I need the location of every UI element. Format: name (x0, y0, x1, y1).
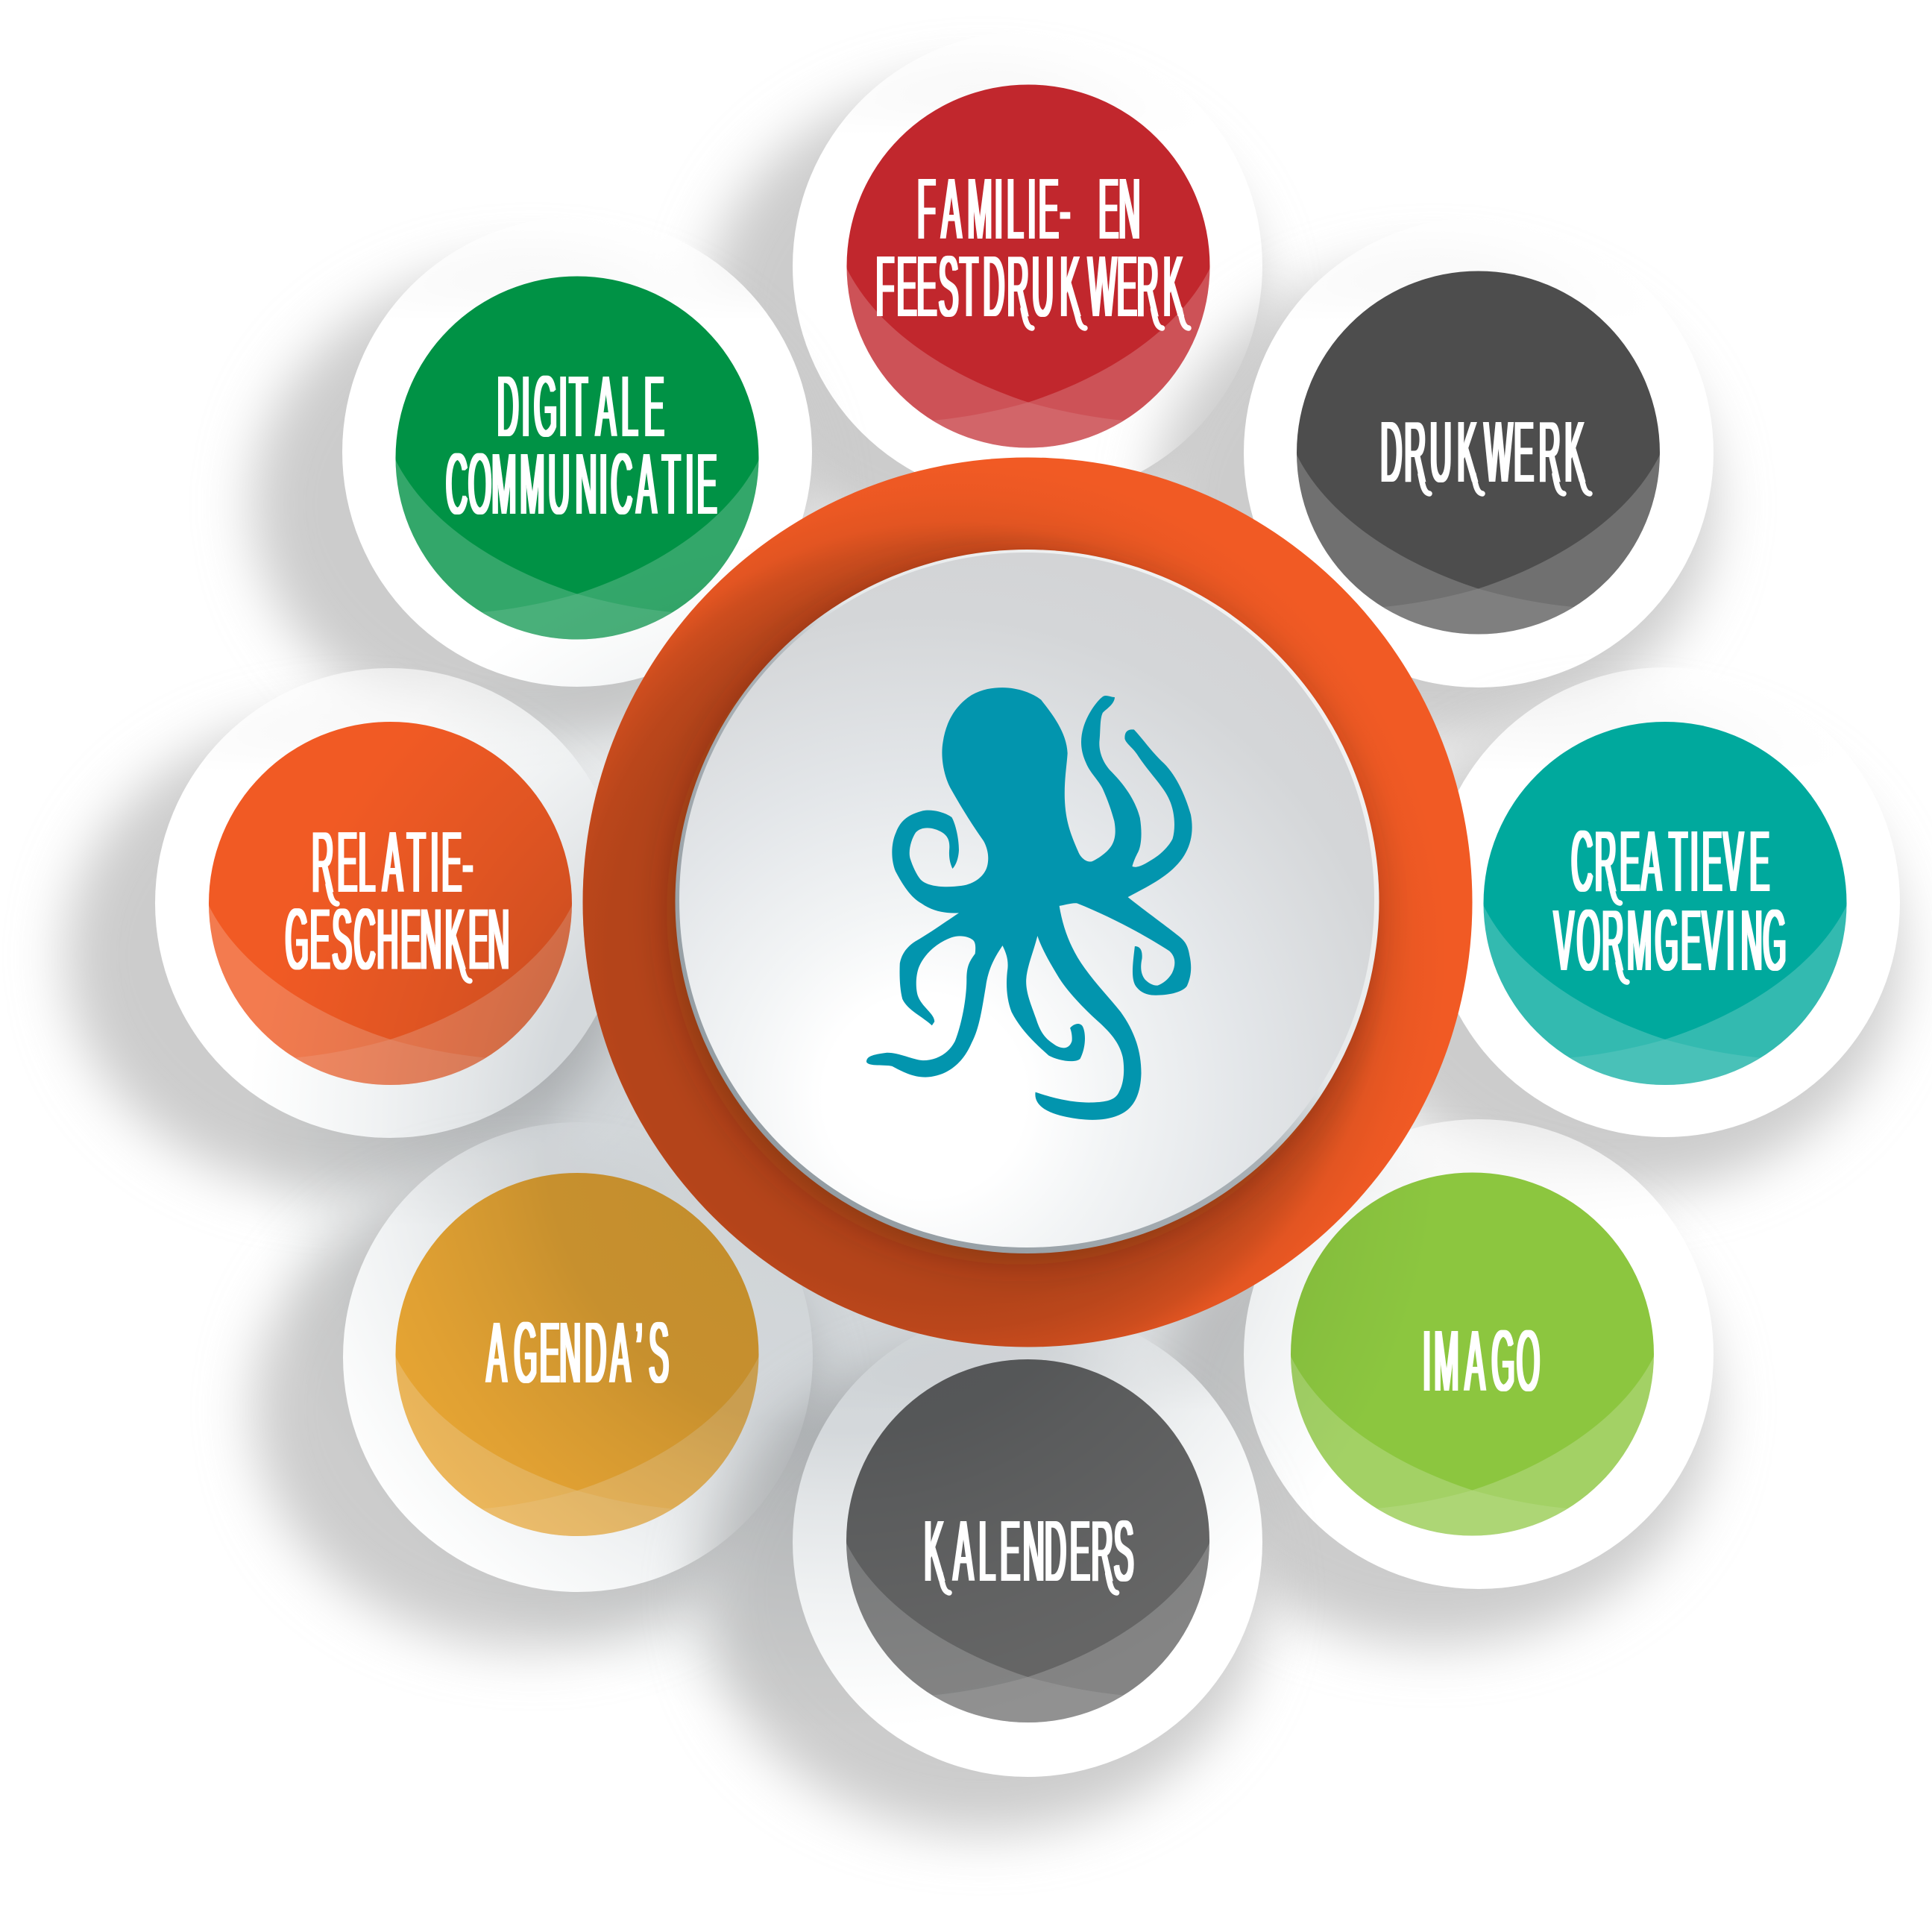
main ring cast shadow (246, 537, 1439, 1730)
ring: drukwerk (1154, 218, 1714, 743)
label: agenda's: AGENDA’S (487, 1305, 669, 1401)
label: creatieve vormgeving: CREATIEVE (1571, 814, 1769, 910)
panel: drukwerk disc (1254, 271, 1702, 676)
label: imago: IMAGO (1423, 1313, 1540, 1409)
label: kalenders: KALENDERS (924, 1503, 1133, 1599)
label: digitale communicatie: DIGITALE (497, 359, 664, 455)
label: relatiegeschenken: RELATIE- (312, 814, 473, 910)
panel: creatieve vormgeving disc (1441, 722, 1889, 1127)
label: digitale communicatie (446, 359, 717, 532)
central orange ring (583, 458, 1472, 1347)
ring: kalenders (703, 1307, 1262, 1833)
panel: digitale communicatie disc (353, 276, 801, 682)
label: creatieve vormgeving: VORMGEVING (1554, 893, 1787, 989)
panel: kalenders disc (804, 1359, 1251, 1764)
panel: imago disc (1248, 1172, 1696, 1578)
ring: imago (1154, 1119, 1714, 1645)
panel: familie- en feestdrukwerk disc (805, 85, 1252, 490)
label: drukwerk: DRUKWERK (1380, 404, 1585, 500)
ring: digitale communicatie (253, 217, 812, 743)
ring: familie- en feestdrukwerk (703, 31, 1262, 557)
panel: agenda's disc (353, 1173, 801, 1578)
label: relatiegeschenken (286, 814, 509, 988)
panel: relatiegeschenken disc (167, 722, 614, 1127)
icon: octopus (866, 687, 1192, 1120)
label: relatiegeschenken: GESCHENKEN (286, 891, 509, 988)
central disc (676, 550, 1379, 1253)
label: familie- en feestdrukwerk: FEESTDRUKWERK (876, 239, 1183, 335)
ring: relatiegeschenken (66, 668, 625, 1194)
ring: creatieve vormgeving (1341, 667, 1900, 1193)
ring: agenda's (254, 1122, 813, 1648)
label: familie- en feestdrukwerk: FAMILIE- EN (917, 161, 1140, 257)
label: creatieve vormgeving (1554, 814, 1787, 989)
label: familie- en feestdrukwerk (876, 161, 1189, 335)
label: digitale communicatie: COMMUNICATIE (446, 436, 717, 532)
